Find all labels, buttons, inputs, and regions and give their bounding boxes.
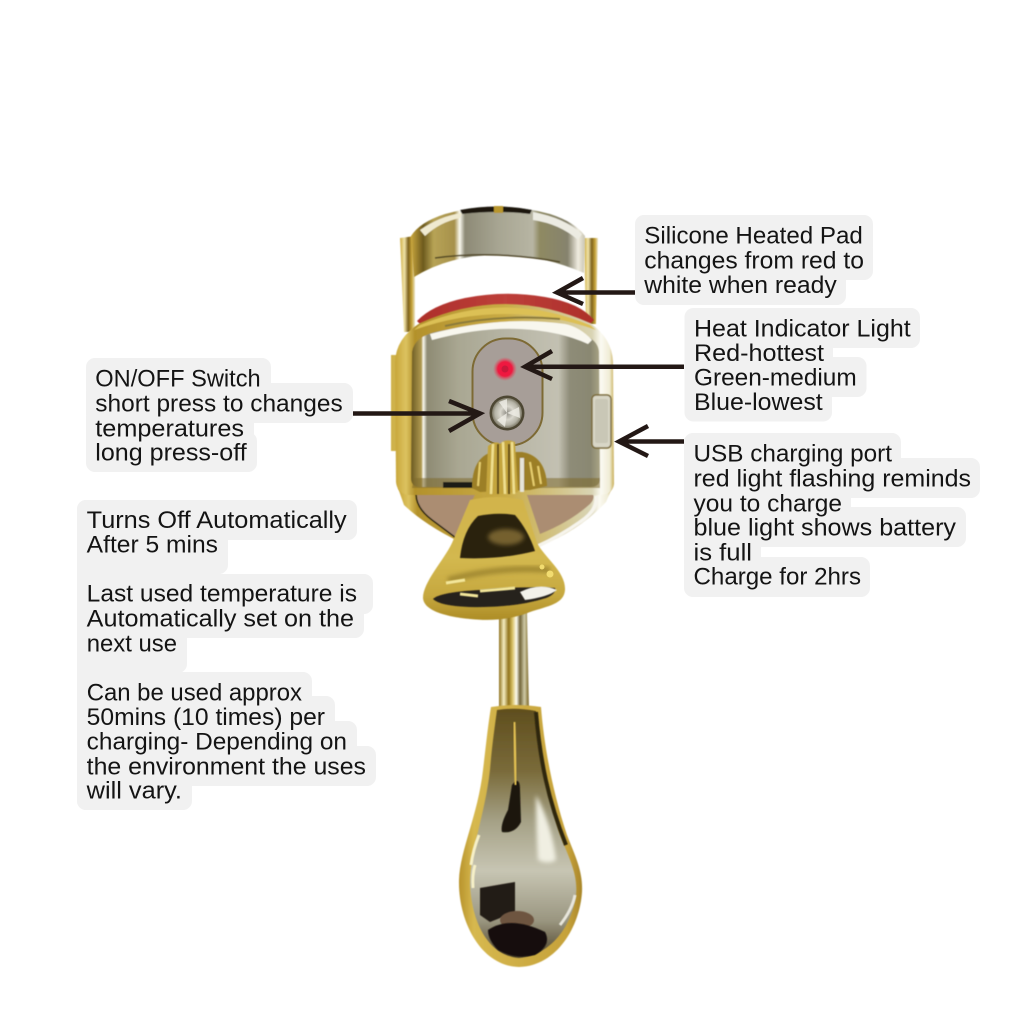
arrow: USB charging port [619, 426, 684, 456]
note: battery life: charging- Depending on [87, 729, 347, 756]
callout: silicone heated pad: changes from red to [644, 248, 864, 275]
red indicator light [493, 357, 517, 381]
arrow: heated pad [557, 278, 635, 304]
note: auto off: Turns Off Automatically [87, 507, 347, 534]
callout: heat indicator light [684, 308, 920, 422]
callout: USB charging port: is full [694, 539, 752, 566]
callout: silicone heated pad: Silicone Heated Pad [644, 223, 863, 250]
callout: USB charging port: blue light shows battery [694, 515, 956, 542]
right side post [584, 238, 598, 324]
lower V frame [398, 488, 612, 546]
note: battery life: will vary. [86, 778, 182, 805]
tan inner backing [417, 492, 476, 538]
control plate [472, 338, 542, 446]
note: battery life [77, 672, 376, 810]
note: auto off [77, 500, 357, 574]
note: battery life: Can be used approx [87, 680, 302, 707]
note: last used temperature [77, 574, 373, 673]
on/off button [490, 396, 524, 430]
stem [499, 612, 529, 712]
callout: heat indicator light: Blue-lowest [694, 389, 823, 416]
bell-shaped pivot [423, 497, 565, 620]
callout: on/off switch: long press-off [95, 440, 247, 467]
note: battery life: the environment the uses [87, 753, 366, 780]
note: battery life: 50mins (10 times) per [87, 704, 325, 731]
note: auto off: After 5 mins [87, 532, 218, 559]
bell dark reflection [460, 514, 535, 558]
teardrop handle [459, 705, 582, 967]
callout: heat indicator light: Green-medium [694, 365, 857, 392]
note: last used temperature: Automatically set on the [87, 605, 354, 632]
bell lower reflection [433, 587, 555, 607]
callout: heat indicator light: Heat Indicator Light [694, 315, 911, 342]
callout: USB charging port: USB charging port [694, 441, 892, 468]
product photo: heated eyelash curler [391, 206, 614, 967]
arrow: heat indicator light [525, 351, 684, 379]
callout: silicone heated pad [635, 215, 873, 305]
callout: USB charging port: you to charge [694, 490, 842, 517]
hinge [472, 440, 547, 496]
note: last used temperature: Last used temperature is [87, 581, 357, 608]
handle mirror reflection [470, 709, 576, 958]
callout: on/off switch: temperatures [95, 415, 244, 442]
callout: usage notes [77, 500, 376, 810]
left side post [400, 236, 415, 332]
curved top bow [411, 206, 585, 277]
callout: silicone heated pad: white when ready [643, 272, 837, 299]
callout: on/off switch: ON/OFF Switch [95, 366, 261, 393]
main body [391, 304, 614, 495]
callout: on/off switch: short press to changes [95, 390, 343, 417]
callout: on/off switch [86, 358, 353, 472]
callout: USB charging port [684, 433, 980, 597]
callout: USB charging port: red light flashing reminds [694, 465, 971, 492]
callout: USB charging port: Charge for 2hrs [694, 564, 861, 591]
silicone heated pad [417, 294, 594, 324]
callout: heat indicator light: Red-hottest [694, 340, 824, 367]
USB charging port [592, 395, 611, 448]
arrow: on/off switch [353, 401, 480, 431]
note: last used temperature: next use [87, 631, 177, 658]
